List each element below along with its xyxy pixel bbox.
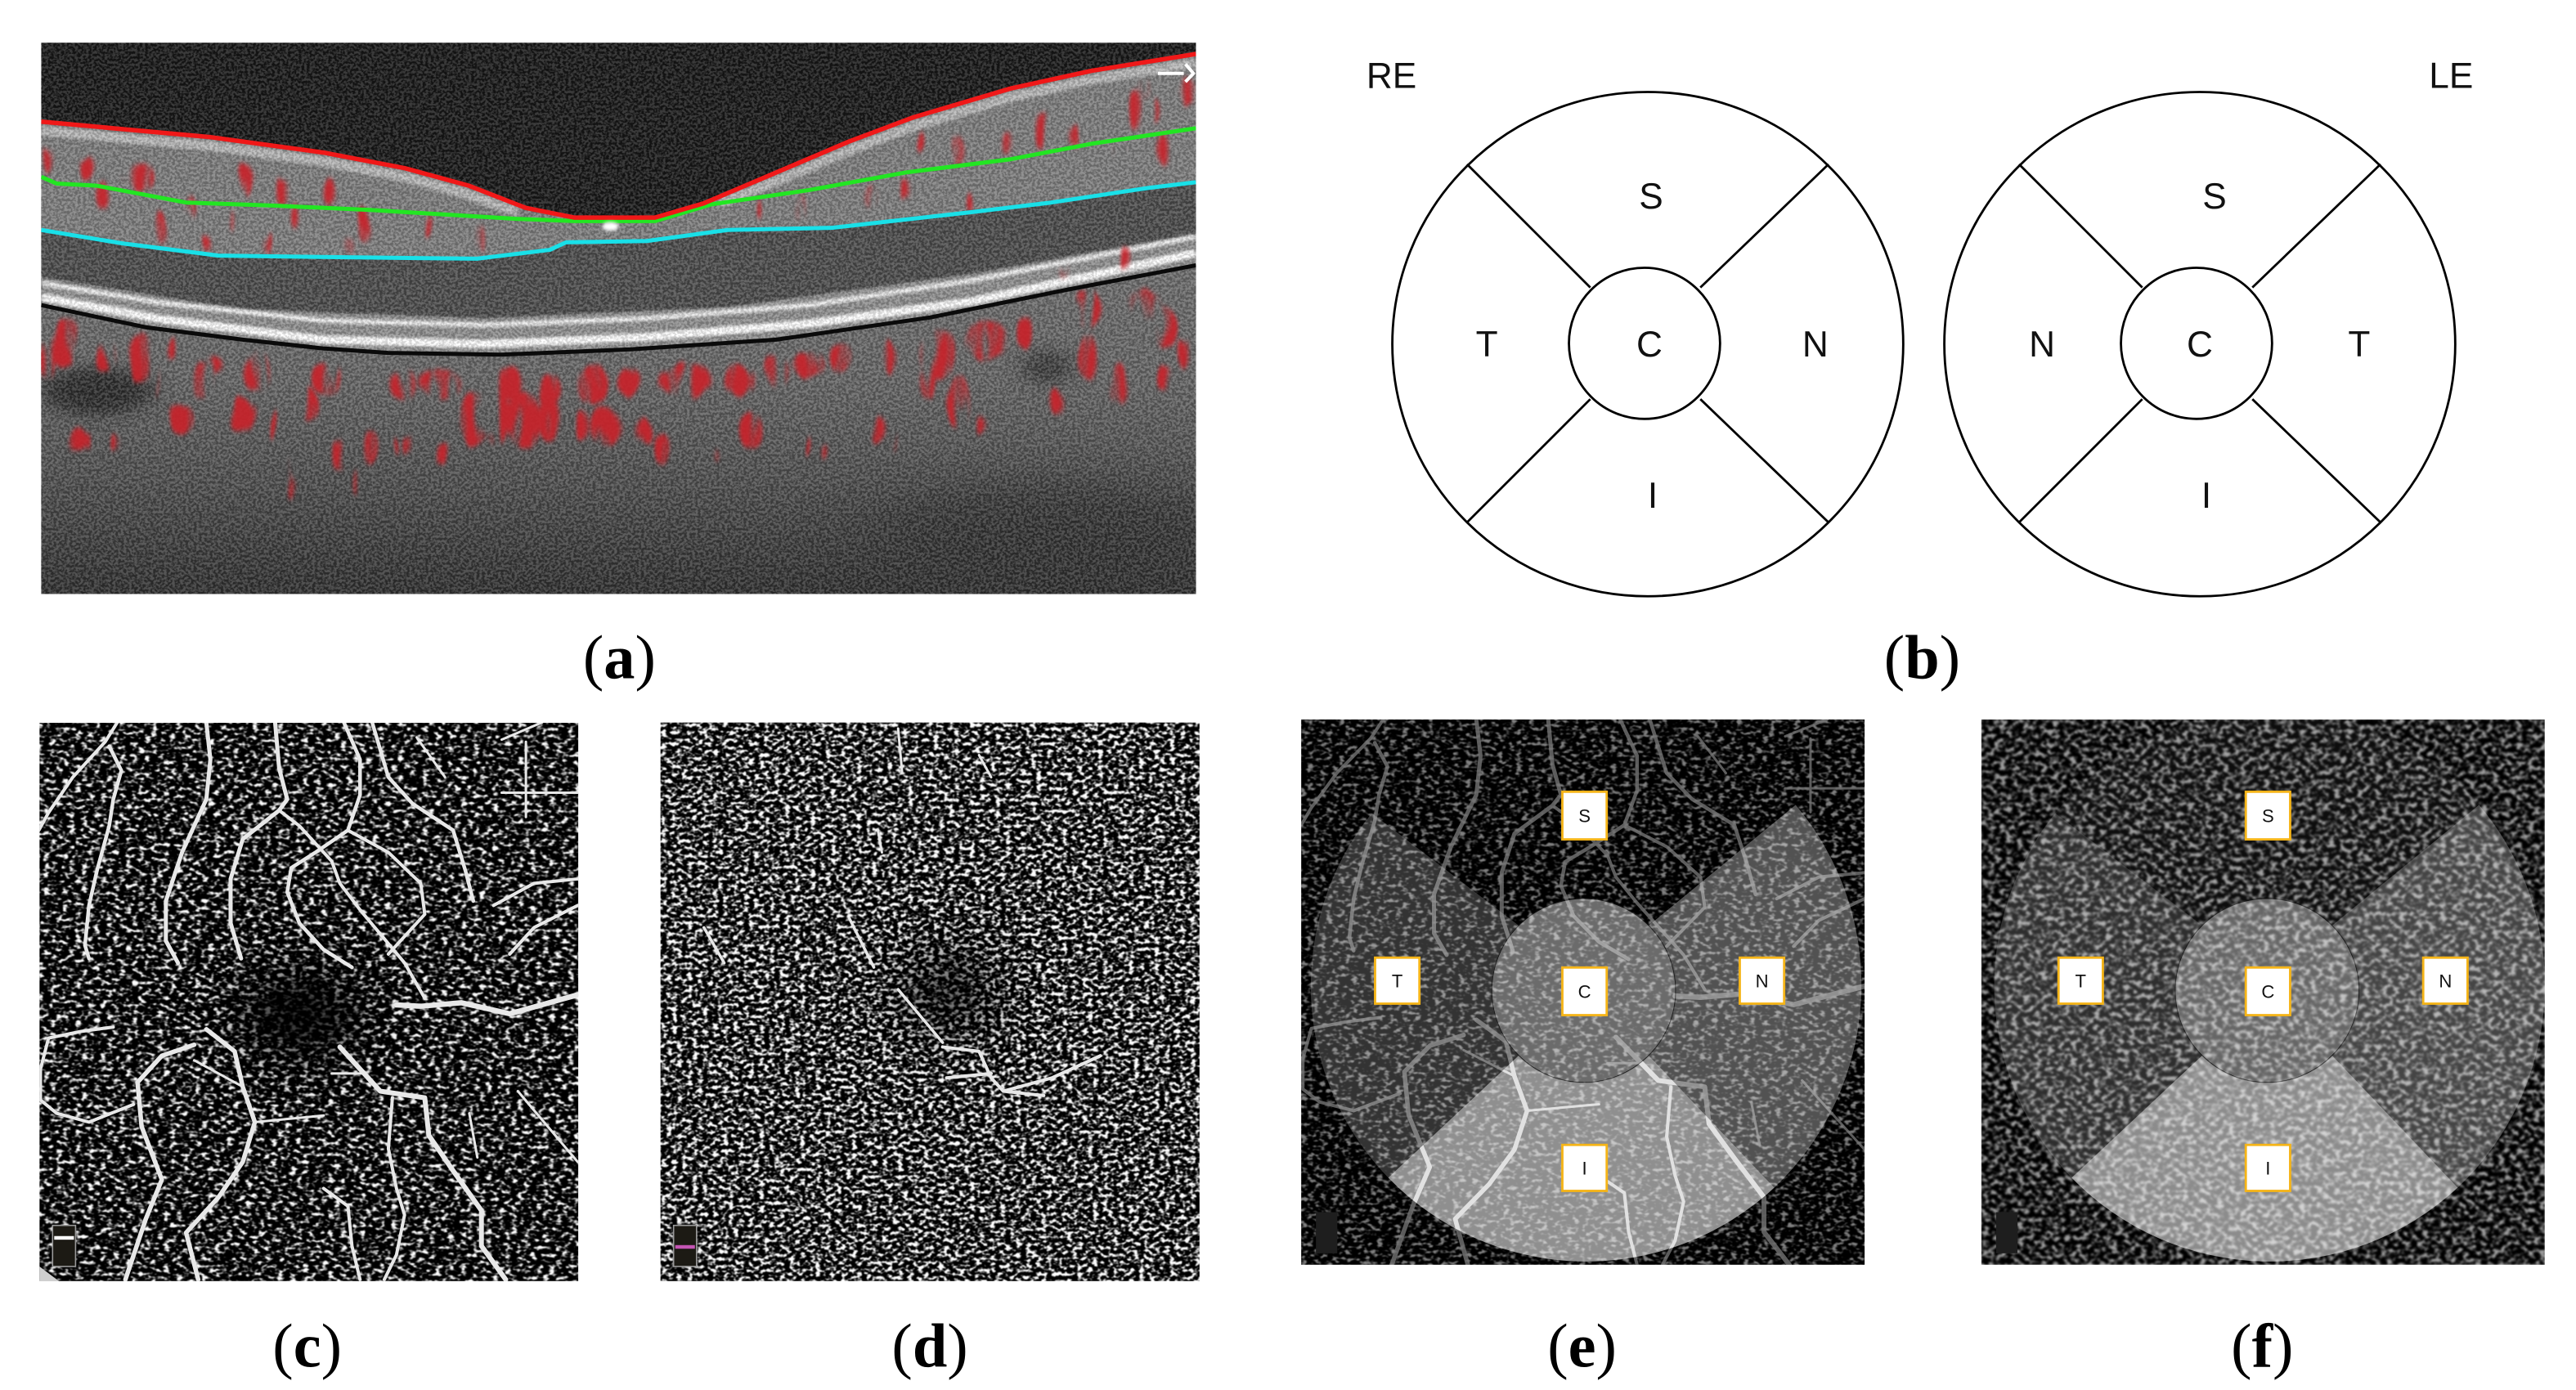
segmentation line: green [41,128,1196,221]
region labels: S [2262,805,2274,826]
region labels: I [2265,1158,2270,1178]
visible vessels [704,729,1101,1096]
signal strength indicator [674,1226,697,1267]
faint indicator [1316,1213,1337,1253]
sector C overlay [2175,899,2359,1083]
left eye sector letters [2029,177,2370,516]
region labels: T [2076,971,2086,991]
region labels: T [1392,971,1402,991]
panel a: OCT B-scan with segmentation lines and red flow signal [40,41,1229,594]
caption f: (f) [2231,1311,2293,1380]
deep tissue and choroid [41,155,1196,594]
region labels: C [2261,981,2274,1002]
panel f: deep plexus with sector overlay [1981,710,2545,1265]
outer retina reflective band [41,235,1196,355]
left eye sector letters: T [2348,325,2370,365]
caption a: (a) [583,623,656,693]
segmentation line: red [41,54,1196,217]
panel e: superficial plexus with sector overlay [1301,720,1865,1265]
caption c: (c) [272,1311,342,1380]
capillary texture [661,723,1200,1281]
red flow signal [40,78,1194,500]
right eye sector letters: S [1639,177,1663,217]
caption b: (b) [1884,623,1960,693]
sector T overlay [1995,813,2202,1177]
sector S overlay [2055,710,2479,926]
choroid dark patches [40,349,1229,579]
panel c: superficial capillary plexus angiogram [38,722,578,1281]
right eye sector letters: N [1802,325,1829,365]
region labels: N [2439,971,2452,991]
sector N overlay [1649,805,1861,1187]
right eye sector letters: T [1476,325,1498,365]
scan arrow marker [1158,64,1193,82]
signal strength indicator [52,1226,75,1267]
nerve fibre bright layer [41,63,1196,213]
dimmed angiogram [1981,720,2545,1265]
reflective lines [41,236,1196,344]
label RE: RE [1367,56,1416,96]
region labels [1375,791,1784,1190]
caption e: (e) [1547,1311,1617,1380]
label LE: LE [2429,56,2473,96]
region labels: C [1578,981,1591,1002]
sector I overlay [2071,1056,2457,1262]
sector N overlay [2332,805,2545,1187]
panel d: deep capillary plexus angiogram [661,723,1200,1281]
right eye sector letters: I [1648,476,1658,516]
inner retinal layers [41,54,1196,258]
left eye sector letters: I [2201,476,2211,516]
left eye sector letters: N [2029,325,2055,365]
foveal avascular dark zone [238,972,363,1058]
large vessels [38,722,577,1280]
region labels: N [1756,971,1769,991]
sector I overlay [1389,1056,1775,1262]
diagram: left eye [1945,92,2455,596]
corner patch [39,1267,59,1281]
left eye sector letters: S [2202,177,2227,217]
right eye sector letters: C [1636,325,1663,365]
capillary texture [39,723,578,1281]
caption d: (d) [891,1311,968,1380]
dimmed angiogram [1301,720,1865,1265]
outer nuclear dark band [41,182,1196,318]
speckle noise [41,41,1196,594]
foveal darker zone [899,951,997,1037]
vitreous dark background [41,41,1196,594]
region labels: I [1582,1158,1587,1178]
segmentation line: cyan [41,182,1196,258]
right eye sector letters [1476,177,1829,516]
left eye sector letters: C [2187,325,2213,365]
panel b: RE and LE sector diagrams [1367,56,2473,596]
region labels: S [1578,805,1591,826]
diagram: right eye [1393,92,1903,596]
bright vessels inside inferior sector [1301,720,1865,1265]
sector C overlay [1492,899,1676,1083]
foveal reflex [603,222,618,231]
faint indicator [1996,1213,2017,1253]
sector T overlay [1311,813,1519,1177]
region labels [2058,791,2467,1190]
segmentation line: black [41,266,1196,355]
